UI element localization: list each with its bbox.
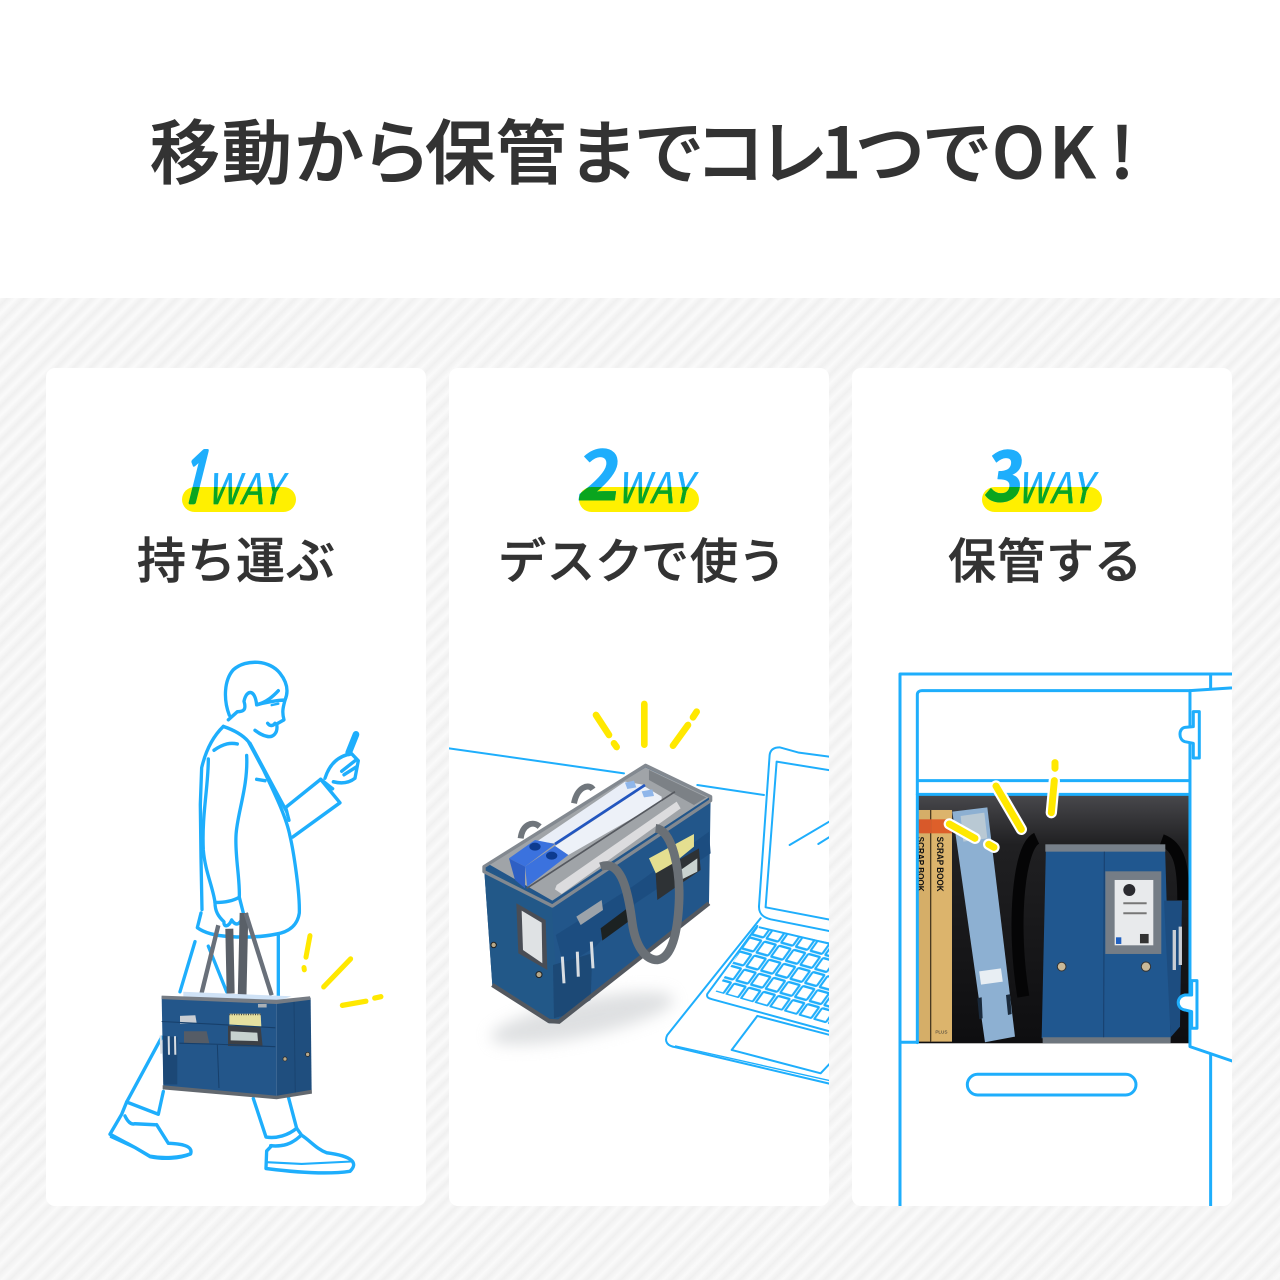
heading: carry: 持ち運ぶ — [137, 522, 335, 593]
badge: 1WAY: WAY — [204, 457, 292, 517]
bag body — [161, 992, 312, 1099]
scrapbooks: SCRAP BOOK — [935, 837, 945, 892]
scrapbooks — [915, 810, 952, 1042]
panel: 1WAY carry — [46, 368, 426, 1206]
bag back handles — [521, 787, 593, 838]
panel: 3WAY storage — [852, 368, 1232, 1206]
locker line drawing — [898, 672, 1232, 1206]
background: striped area — [0, 298, 1280, 1280]
panel: 2WAY desk — [449, 368, 849, 1206]
badge: 1WAY — [182, 449, 296, 512]
bag pockets and contents — [491, 828, 711, 1022]
badge: 1WAY: 1 — [172, 444, 222, 514]
badge: 2WAY: WAY — [614, 456, 702, 516]
bag strap — [1018, 838, 1183, 997]
accent marks — [949, 763, 1055, 847]
heading: use at desk: デスクで使う — [498, 522, 786, 592]
laptop line drawing — [665, 746, 829, 1085]
bag handles — [199, 913, 272, 1002]
scrapbooks: SCRAP BOOK — [915, 837, 925, 892]
badge: 3WAY: WAY — [1014, 456, 1102, 516]
badge: 1WAY: WAY — [204, 457, 292, 517]
badge: 2WAY: 2 — [573, 421, 629, 520]
badge: 3WAY: 3 — [980, 422, 1032, 521]
title: 移動から保管までコレ1つでOK! — [150, 98, 1134, 199]
illustration: bag on desk with laptop — [449, 704, 849, 1088]
illustration: locker with bag — [898, 672, 1232, 1206]
heading: store: 保管する — [948, 522, 1142, 592]
badge: 1WAY: 1 — [172, 444, 222, 514]
person line drawing — [110, 662, 358, 1173]
blue file — [952, 807, 1015, 1042]
bag — [1042, 844, 1182, 1043]
badge: 2WAY — [578, 448, 699, 512]
bag shadow — [490, 987, 674, 1050]
accent marks — [304, 936, 381, 1005]
badge: 3WAY: WAY — [1014, 456, 1102, 516]
badge: 2WAY: 2 — [573, 421, 629, 520]
badge: 3WAY: 3 — [980, 422, 1032, 521]
locker shelf interior — [917, 795, 1189, 1043]
badge: 3WAY — [982, 449, 1102, 512]
desk line — [449, 748, 764, 795]
badge: 2WAY: WAY — [614, 456, 702, 516]
illustration: walking person with bag — [110, 662, 381, 1173]
scrapbooks: PLUS — [935, 1029, 948, 1034]
accent marks — [596, 704, 697, 747]
bag body and interior — [484, 765, 711, 1023]
